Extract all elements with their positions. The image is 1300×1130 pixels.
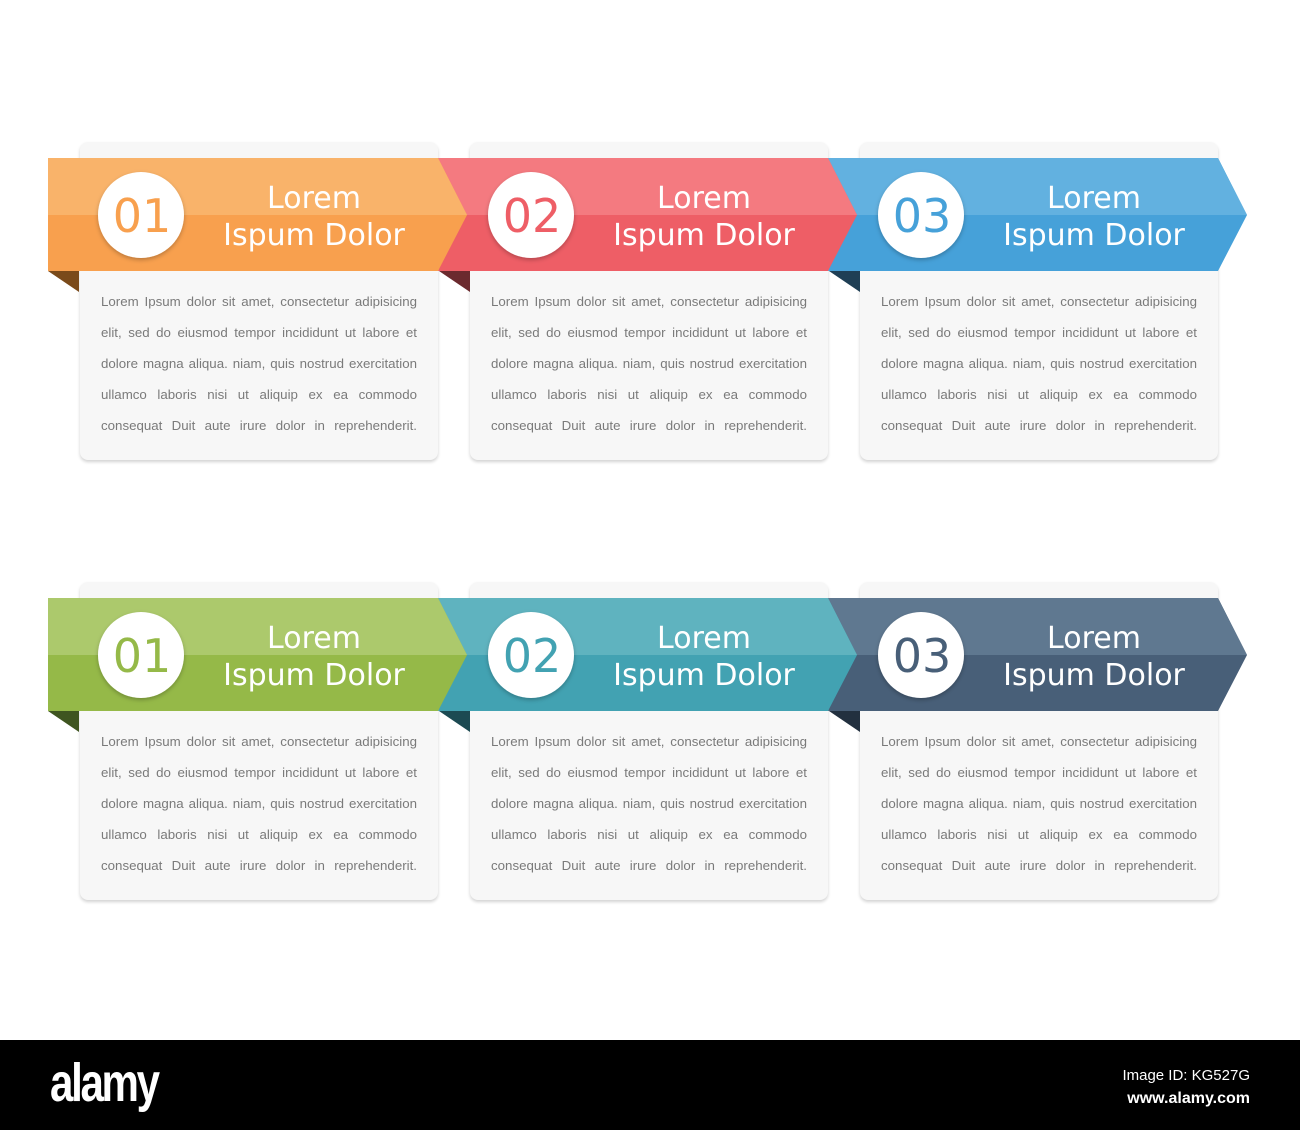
ribbon row2 03: 03 xyxy=(893,629,951,683)
text: row1 02: Lorem Ipsum dolor sit amet, consectetur adipisicing xyxy=(491,294,807,309)
text: row1 03: ullamco laboris nisi ut aliquip ex ea commodo xyxy=(881,387,1197,402)
text: row2 01: dolore magna aliqua. niam, quis nostrud exercitation xyxy=(101,796,417,811)
card: row1 03 xyxy=(860,142,1218,460)
ribbon row2 01: Ispum Dolor xyxy=(223,658,406,693)
ribbon row2 01: Lorem xyxy=(267,621,361,656)
text: row1 01: Lorem Ipsum dolor sit amet, consectetur adipisicing xyxy=(101,294,417,309)
card: row1 01 xyxy=(80,142,438,460)
ribbon row1 03: 03 xyxy=(893,189,951,243)
text: row2 02: dolore magna aliqua. niam, quis nostrud exercitation xyxy=(491,796,807,811)
text: row2 01: consequat Duit aute irure dolor in reprehenderit. xyxy=(101,858,417,873)
text: row1 02: ullamco laboris nisi ut aliquip ex ea commodo xyxy=(491,387,807,402)
card: row2 01 xyxy=(80,582,438,900)
text: row2 02 xyxy=(491,734,807,873)
text: row2 02: elit, sed do eiusmod tempor incididunt ut labore et xyxy=(491,765,807,780)
text: row1 03 xyxy=(881,294,1197,433)
card: row2 02 xyxy=(470,582,828,900)
ribbon row1 01: Lorem xyxy=(267,181,361,216)
ribbon row2 03 xyxy=(828,598,1247,732)
text: row2 03 xyxy=(881,734,1197,873)
text: row2 03: elit, sed do eiusmod tempor incididunt ut labore et xyxy=(881,765,1197,780)
text: row2 02: ullamco laboris nisi ut aliquip ex ea commodo xyxy=(491,827,807,842)
text: row2 03: ullamco laboris nisi ut aliquip ex ea commodo xyxy=(881,827,1197,842)
footer logo: alamy xyxy=(50,1053,158,1113)
footer image id: www.alamy.com xyxy=(1127,1090,1250,1107)
ribbon row1 03 xyxy=(828,158,1247,292)
text: row1 03: dolore magna aliqua. niam, quis nostrud exercitation xyxy=(881,356,1197,371)
text: row1 03: elit, sed do eiusmod tempor incididunt ut labore et xyxy=(881,325,1197,340)
text: row1 01 xyxy=(101,294,417,433)
text: row1 02: dolore magna aliqua. niam, quis nostrud exercitation xyxy=(491,356,807,371)
text: row2 01 xyxy=(101,734,417,873)
card: row2 03 xyxy=(860,582,1218,900)
ribbon row1 03: Lorem xyxy=(1047,181,1141,216)
ribbon row1 02: Lorem xyxy=(657,181,751,216)
ribbon row1 02: 02 xyxy=(503,189,561,243)
ribbon row2 01: 01 xyxy=(113,629,171,683)
text: row2 03: Lorem Ipsum dolor sit amet, consectetur adipisicing xyxy=(881,734,1197,749)
ribbon row2 01 xyxy=(48,598,467,732)
ribbon row1 03: Ispum Dolor xyxy=(1003,218,1186,253)
ribbon row2 02 xyxy=(438,598,857,732)
ribbon row2 03: Ispum Dolor xyxy=(1003,658,1186,693)
card: row1 02 xyxy=(470,142,828,460)
text: row1 02: consequat Duit aute irure dolor in reprehenderit. xyxy=(491,418,807,433)
footer image id: Image ID: KG527G xyxy=(1122,1067,1250,1084)
footer image id xyxy=(1122,1067,1250,1107)
text: row1 02: elit, sed do eiusmod tempor incididunt ut labore et xyxy=(491,325,807,340)
text: row2 01: elit, sed do eiusmod tempor incididunt ut labore et xyxy=(101,765,417,780)
ribbon row2 02: Ispum Dolor xyxy=(613,658,796,693)
text: row1 01: ullamco laboris nisi ut aliquip ex ea commodo xyxy=(101,387,417,402)
text: row2 03: dolore magna aliqua. niam, quis nostrud exercitation xyxy=(881,796,1197,811)
ribbon row2 02: Lorem xyxy=(657,621,751,656)
text: row1 03: consequat Duit aute irure dolor in reprehenderit. xyxy=(881,418,1197,433)
ribbon row2 02: 02 xyxy=(503,629,561,683)
text: row2 02: consequat Duit aute irure dolor in reprehenderit. xyxy=(491,858,807,873)
text: row2 01: ullamco laboris nisi ut aliquip ex ea commodo xyxy=(101,827,417,842)
ribbon row1 02: Ispum Dolor xyxy=(613,218,796,253)
text: row1 02 xyxy=(491,294,807,433)
ribbon row1 01: Ispum Dolor xyxy=(223,218,406,253)
ribbon row2 03: Lorem xyxy=(1047,621,1141,656)
text: row2 03: consequat Duit aute irure dolor in reprehenderit. xyxy=(881,858,1197,873)
footer bar xyxy=(0,1040,1300,1130)
ribbon row1 02 xyxy=(438,158,857,292)
ribbon row1 01: 01 xyxy=(113,189,171,243)
text: row1 01: elit, sed do eiusmod tempor incididunt ut labore et xyxy=(101,325,417,340)
ribbon row1 01 xyxy=(48,158,467,292)
text: row1 01: dolore magna aliqua. niam, quis nostrud exercitation xyxy=(101,356,417,371)
text: row2 01: Lorem Ipsum dolor sit amet, consectetur adipisicing xyxy=(101,734,417,749)
text: row1 03: Lorem Ipsum dolor sit amet, consectetur adipisicing xyxy=(881,294,1197,309)
text: row1 01: consequat Duit aute irure dolor in reprehenderit. xyxy=(101,418,417,433)
text: row2 02: Lorem Ipsum dolor sit amet, consectetur adipisicing xyxy=(491,734,807,749)
